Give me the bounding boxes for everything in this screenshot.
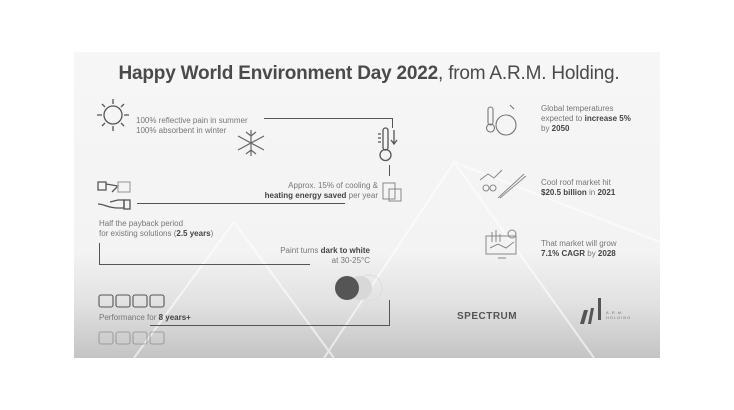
text: payback: for existing solutions (2.5 years)	[99, 229, 213, 238]
text: global temperatures	[541, 104, 631, 133]
panel: background	[74, 52, 660, 358]
icon: circles	[335, 274, 382, 300]
icon: snowflake	[238, 130, 264, 156]
icon: cool roof	[480, 170, 526, 198]
logo: ARM holding	[580, 298, 631, 324]
text: energy saved: heating energy saved per year	[265, 191, 378, 200]
icon: calculator	[382, 182, 402, 202]
text: global temperatures: Global temperatures	[541, 104, 613, 113]
text: dark to white	[280, 246, 370, 265]
text: dark to white: at 30-25°C	[332, 256, 370, 265]
text: energy saved	[265, 181, 378, 200]
logo: ARM holding: A.R.M.	[606, 310, 624, 315]
text: cool roof	[541, 178, 616, 197]
text: CAGR: 7.1% CAGR by 2028	[541, 249, 616, 258]
text: dark to white: Paint turns dark to white	[280, 246, 370, 255]
icon: thermometer	[378, 127, 398, 162]
text: global temperatures: expected to increase 5%	[541, 114, 631, 123]
text: global temperatures: by 2050	[541, 124, 569, 133]
text: CAGR: That market will grow	[541, 239, 617, 248]
text: reflective: 100% reflective pain in summer	[136, 116, 248, 125]
text: performance: Performance for 8 years+	[99, 313, 191, 322]
text: cool roof: $20.5 billion in 2021	[541, 188, 615, 197]
text: CAGR	[541, 239, 617, 258]
icon: sun	[97, 99, 129, 131]
text: payback: Half the payback period	[99, 219, 183, 228]
text: energy saved: Approx. 15% of cooling &	[288, 181, 378, 190]
text: cool roof: Cool roof market hit	[541, 178, 611, 187]
icon: chart monitor	[486, 230, 516, 258]
line: middle connector	[99, 243, 100, 265]
line: top connector	[264, 118, 393, 119]
icon: hand money	[97, 181, 131, 210]
title: Happy World Environment Day 2022, from A.R.M. Holding.	[119, 63, 619, 84]
text: reflective	[136, 116, 248, 135]
text: payback	[99, 219, 213, 238]
logo: spectrum: SPECTRUM	[457, 311, 517, 322]
text: reflective: 100% absorbent in winter	[136, 126, 226, 135]
logo: ARM holding: HOLDING	[606, 315, 631, 320]
icon: calendars	[98, 294, 165, 308]
icon: globe thermometer	[486, 104, 517, 136]
